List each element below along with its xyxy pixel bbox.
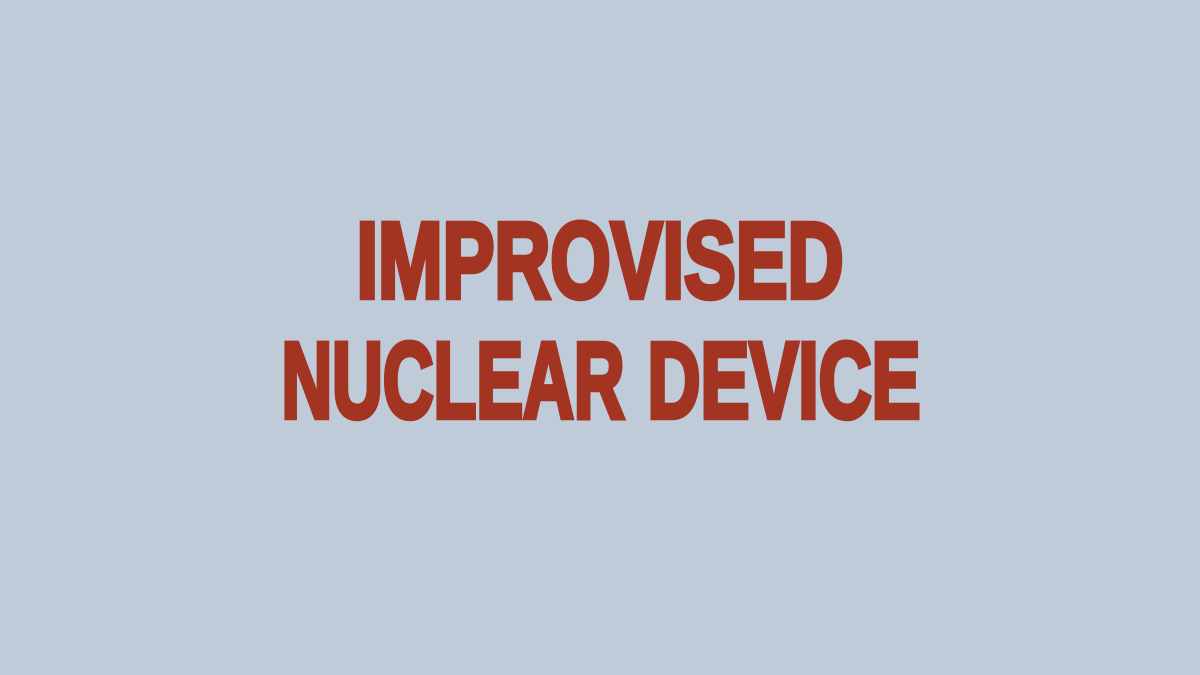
- title line 1: IMPROVISED: [356, 200, 844, 320]
- title line 2: DEVICE: [648, 320, 920, 440]
- title line 2: NUCLEAR: [282, 320, 624, 440]
